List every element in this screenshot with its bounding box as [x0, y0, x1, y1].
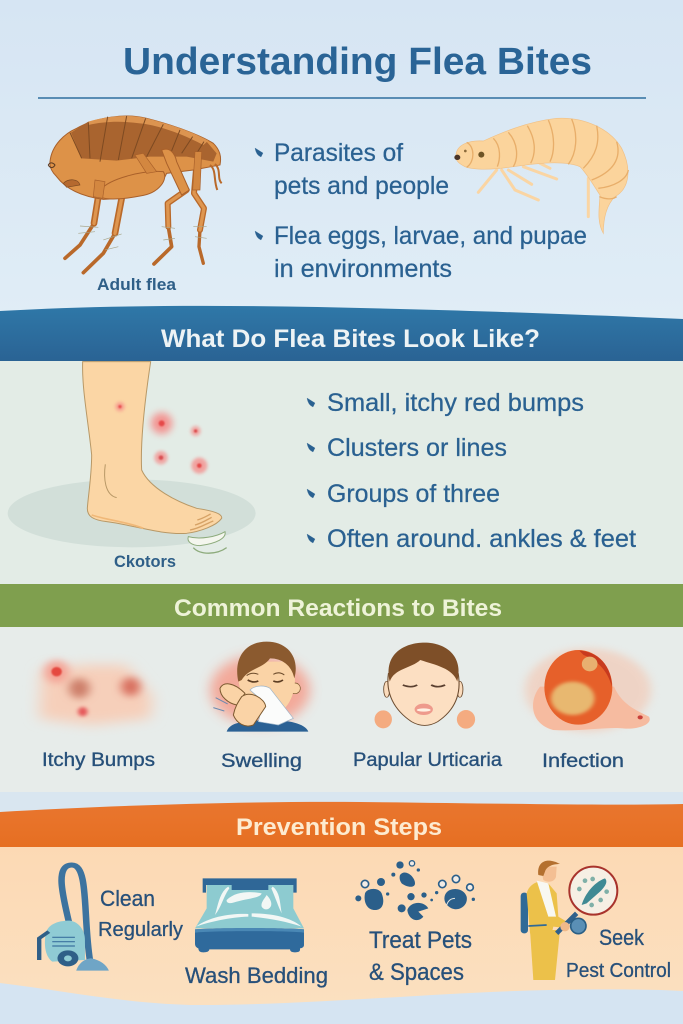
title: Understanding Flea Bites	[123, 41, 592, 83]
paw 3	[398, 891, 438, 920]
illustration: flea larva	[454, 118, 628, 233]
reaction labels	[42, 750, 624, 772]
heading band: common reactions: Common Reactions to Bites	[174, 595, 502, 622]
panel: prevention steps	[0, 845, 683, 1024]
heading band: what do flea bites look like	[0, 306, 683, 361]
illustration: adult flea	[48, 116, 222, 273]
reaction labels: Infection	[542, 751, 624, 772]
prevention labels: Seek	[599, 925, 645, 950]
caption: foot: Ckotors	[114, 553, 176, 571]
bullet list: parasites and life stages: Parasites of	[274, 139, 403, 167]
prevention labels: & Spaces	[369, 959, 464, 986]
reaction labels: Papular Urticaria	[353, 750, 502, 771]
heading band: what do flea bites look like: What Do Flea Bites Look Like?	[161, 325, 540, 353]
bullet list: bite appearance	[307, 389, 636, 553]
paw 2	[391, 861, 420, 887]
icon: itchy bumps	[39, 660, 152, 725]
prevention labels: Pest Control	[566, 960, 671, 982]
bottom wave	[0, 983, 683, 1024]
panel: introduction	[0, 0, 683, 320]
prevention labels: Clean	[100, 886, 155, 911]
panel: common reactions	[0, 627, 683, 832]
heading band: common reactions	[0, 584, 683, 627]
bullet list: bite appearance: Small, itchy red bumps	[327, 389, 584, 417]
bullet list: parasites and life stages: Flea eggs, larvae, and pupae	[274, 222, 587, 250]
bullet list: bite appearance: Often around. ankles & feet	[327, 525, 636, 553]
icon: papular urticaria	[375, 643, 475, 729]
icon: infection	[525, 648, 651, 732]
caption: adult flea: Adult flea	[97, 276, 177, 294]
bullet list: parasites and life stages: pets and people	[274, 172, 449, 200]
prevention labels: Regularly	[98, 919, 183, 941]
paw 1	[355, 878, 389, 910]
illustration: foot with bites	[8, 362, 256, 553]
paw 4	[439, 875, 475, 909]
icon: swelling	[210, 642, 310, 732]
panel: what flea bites look like	[0, 355, 683, 590]
icon: pest control worker	[521, 861, 617, 980]
icon: paw prints	[355, 861, 475, 920]
icon: bed	[195, 878, 304, 952]
heading band: prevention steps	[0, 802, 683, 847]
prevention labels: Treat Pets	[369, 927, 472, 954]
bullet list: parasites and life stages	[255, 139, 587, 283]
bullet list: bite appearance: Clusters or lines	[327, 434, 507, 462]
prevention labels: Wash Bedding	[185, 963, 328, 988]
reaction labels: Itchy Bumps	[42, 750, 155, 771]
bullet list: parasites and life stages: in environments	[274, 255, 452, 283]
icon: vacuum cleaner	[39, 865, 109, 971]
prevention labels	[98, 886, 671, 988]
heading band: prevention steps: Prevention Steps	[236, 814, 442, 841]
bullet list: bite appearance: Groups of three	[327, 480, 500, 508]
reaction labels: Swelling	[221, 751, 302, 772]
